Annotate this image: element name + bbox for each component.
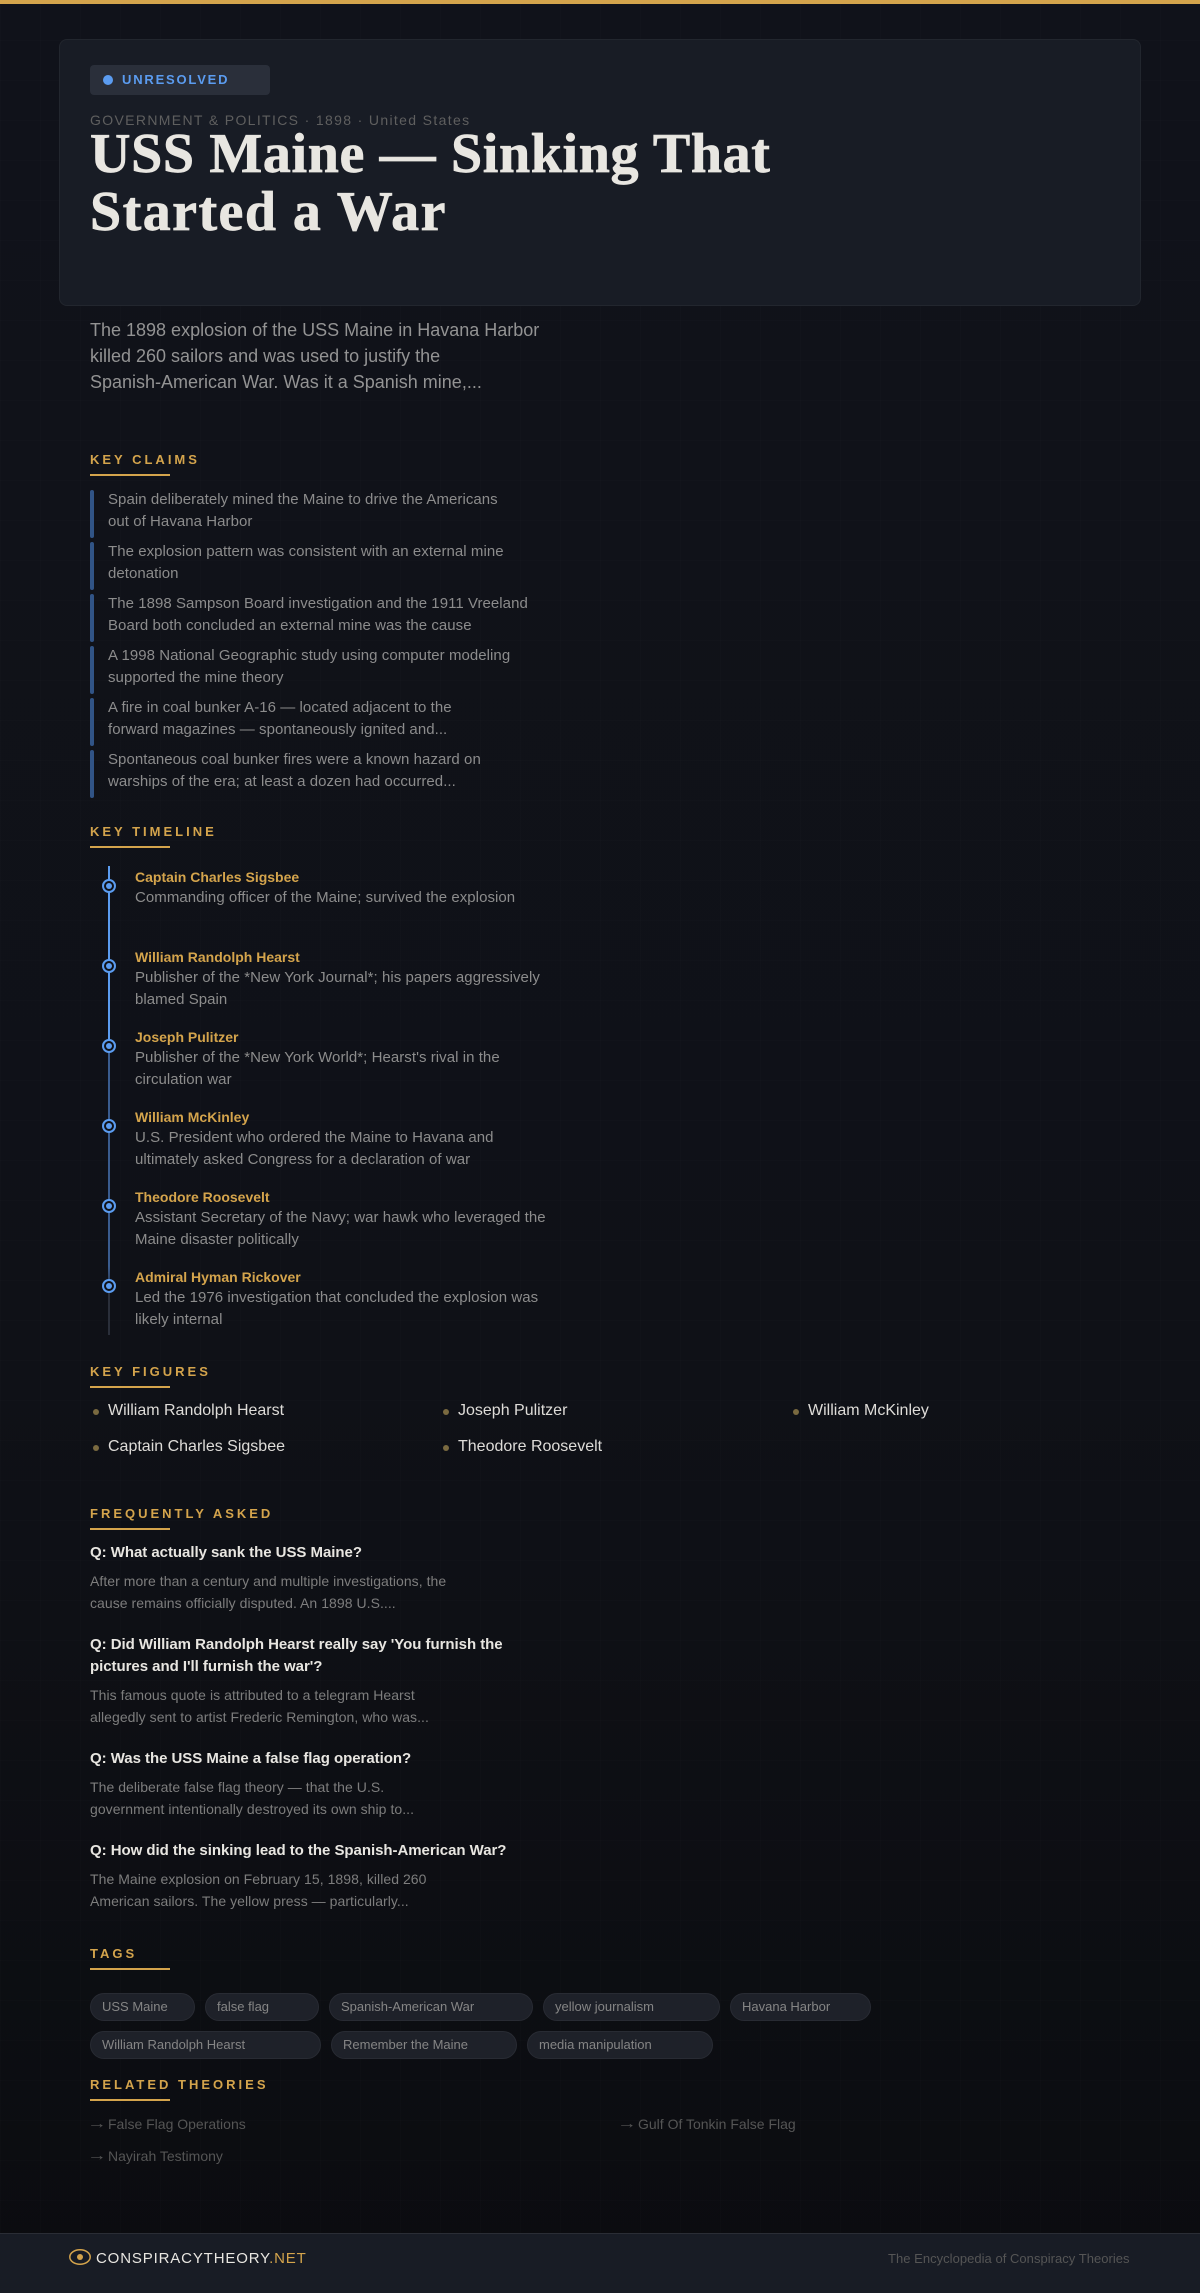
title: Started a War [90,181,447,243]
claim 3: Board both concluded an external mine was the cause [108,617,472,634]
link: False Flag Operations: False Flag Operations [108,2116,246,2132]
icon: eye logo [69,2249,91,2265]
claim 1 [90,490,498,538]
heading: frequently asked: FREQUENTLY ASKED [90,1506,273,1521]
question 2: Q: Did William Randolph Hearst really say 'You furnish the [90,1636,503,1653]
tag: USS Maine [102,1999,168,2014]
footer tagline: The Encyclopedia of Conspiracy Theories [888,2251,1130,2266]
figure: Captain Charles Sigsbee: Captain Charles Sigsbee [108,1438,285,1455]
question 4: American sailors. The yellow press — particularly... [90,1893,409,1909]
question 2: pictures and I'll furnish the war'? [90,1658,322,1675]
claim 2 [90,542,504,590]
marker 4 [102,1119,116,1133]
entry: Theodore Roosevelt: Assistant Secretary of the Navy; war hawk who leveraged the [135,1209,546,1226]
timeline rail [108,866,110,1335]
tag: Remember the Maine [343,2037,468,2052]
entry: William McKinley: U.S. President who ordered the Maine to Havana and [135,1129,494,1146]
tag [331,2031,517,2059]
status badge: unresolved [90,65,270,95]
question 3: government intentionally destroyed its own ship to... [90,1801,414,1817]
entry: Joseph Pulitzer: Publisher of the *New York World*; Hearst's rival in the [135,1049,500,1066]
panel: key claims list [90,490,528,798]
question 1: After more than a century and multiple investigations, the [90,1573,446,1589]
question 4: Q: How did the sinking lead to the Spanish-American War? [90,1842,506,1859]
entry: Theodore Roosevelt: Theodore Roosevelt [135,1189,270,1205]
entry: Admiral Hyman Rickover: Admiral Hyman Rickover [135,1269,301,1285]
entry: Captain Charles Sigsbee [135,869,515,906]
entry: Admiral Hyman Rickover: Led the 1976 investigation that concluded the explosion was [135,1289,538,1306]
icon: status dot [103,75,113,85]
figure: William McKinley: William McKinley [808,1402,929,1419]
link: Nayirah Testimony: Nayirah Testimony [108,2148,223,2164]
tag [543,1993,720,2021]
claim 6 [90,750,481,798]
entry: Joseph Pulitzer: circulation war [135,1071,232,1088]
question 4: The Maine explosion on February 15, 1898, killed 260 [90,1871,426,1887]
marker 3 [102,1039,116,1053]
panel: FAQ [90,1544,506,1909]
tag: William Randolph Hearst [102,2037,245,2052]
entry: William Randolph Hearst: William Randolph Hearst [135,949,300,965]
tag [527,2031,713,2059]
summary text: The 1898 explosion of the USS Maine in Havana Harbor [90,320,539,340]
panel: key figures list [93,1402,929,1455]
entry: Joseph Pulitzer: Joseph Pulitzer [135,1029,238,1045]
question 2: allegedly sent to artist Frederic Remington, who was... [90,1709,429,1725]
entry: William McKinley: William McKinley [135,1109,249,1125]
claim 5: A fire in coal bunker A-16 — located adjacent to the [108,699,452,716]
footer [0,2233,1200,2293]
status badge: unresolved: UNRESOLVED [122,72,229,87]
summary text: Spanish-American War. Was it a Spanish mine,... [90,372,482,392]
entry: William Randolph Hearst: blamed Spain [135,991,227,1008]
title [90,123,771,243]
claim 4: A 1998 National Geographic study using computer modeling [108,647,510,664]
tag [730,1993,871,2021]
heading: related theories: RELATED THEORIES [90,2077,268,2092]
panel: tags [90,1993,871,2059]
heading: key claims: KEY CLAIMS [90,452,200,467]
figure: William Randolph Hearst: William Randolph Hearst [108,1402,284,1419]
figure: Theodore Roosevelt: Theodore Roosevelt [458,1438,602,1455]
question 3: The deliberate false flag theory — that the U.S. [90,1779,384,1795]
entry: Captain Charles Sigsbee: Commanding officer of the Maine; survived the explosion [135,889,515,906]
marker 2 [102,959,116,973]
top accent bar [0,0,1200,4]
question 3 [90,1750,414,1817]
entry: William Randolph Hearst: Publisher of the *New York Journal*; his papers aggressively [135,969,540,986]
claim 5: forward magazines — spontaneously ignited and... [108,721,447,738]
question 1: Q: What actually sank the USS Maine? [90,1544,362,1561]
title: USS Maine — Sinking That [90,123,771,185]
link: Nayirah Testimony: → [87,2147,107,2163]
figure: Joseph Pulitzer: Joseph Pulitzer [458,1402,567,1419]
claim 4: supported the mine theory [108,669,284,686]
claim 4 [90,646,510,694]
claim 2: detonation [108,565,179,582]
question 2 [90,1636,503,1725]
summary text [90,320,539,392]
marker 5 [102,1199,116,1213]
tag: media manipulation [539,2037,652,2052]
link: Gulf Of Tonkin False Flag: Gulf Of Tonkin False Flag [638,2116,796,2132]
claim 3: The 1898 Sampson Board investigation and the 1911 Vreeland [108,595,528,612]
entry: William McKinley [135,1109,494,1168]
entry: Captain Charles Sigsbee: Captain Charles Sigsbee [135,869,299,885]
claim 6: Spontaneous coal bunker fires were a known hazard on [108,751,481,768]
tag [90,2031,321,2059]
timeline [102,866,546,1335]
claim 5 [90,698,452,746]
tag: false flag [217,1999,269,2014]
category and date line: GOVERNMENT & POLITICS · 1898 · United States [90,112,470,128]
tag: yellow journalism [555,1999,654,2014]
heading: key figures: KEY FIGURES [90,1364,211,1379]
heading: tags: TAGS [90,1946,137,1961]
summary text: killed 260 sailors and was used to justify the [90,346,440,366]
marker 6 [102,1279,116,1293]
claim 1: Spain deliberately mined the Maine to drive the Americans [108,491,498,508]
logo wordmark: CONSPIRACYTHEORY.NET [96,2250,307,2267]
question 1: cause remains officially disputed. An 1898 U.S.... [90,1595,396,1611]
tag [205,1993,319,2021]
tag: Spanish-American War [341,1999,474,2014]
heading: key timeline: KEY TIMELINE [90,824,217,839]
tag [329,1993,533,2021]
entry: Theodore Roosevelt [135,1189,546,1248]
question 2: This famous quote is attributed to a telegram Hearst [90,1687,415,1703]
entry: Admiral Hyman Rickover [135,1269,538,1328]
question 3: Q: Was the USS Maine a false flag operation? [90,1750,411,1767]
tag [90,1993,195,2021]
claim 3 [90,594,528,642]
entry: William Randolph Hearst [135,949,540,1008]
link: Gulf Of Tonkin False Flag: → [617,2115,637,2131]
question 4 [90,1842,506,1909]
entry: Joseph Pulitzer [135,1029,500,1088]
panel: related theories links [87,2115,796,2164]
link: False Flag Operations: → [87,2115,107,2131]
marker 1 [102,879,116,893]
tag: Havana Harbor [742,1999,830,2014]
panel: hero header [59,39,1141,306]
claim 1: out of Havana Harbor [108,513,252,530]
claim 6: warships of the era; at least a dozen had occurred... [108,773,456,790]
entry: Theodore Roosevelt: Maine disaster politically [135,1231,299,1248]
entry: William McKinley: ultimately asked Congress for a declaration of war [135,1151,470,1168]
claim 2: The explosion pattern was consistent with an external mine [108,543,504,560]
entry: Admiral Hyman Rickover: likely internal [135,1311,222,1328]
question 1 [90,1544,446,1611]
